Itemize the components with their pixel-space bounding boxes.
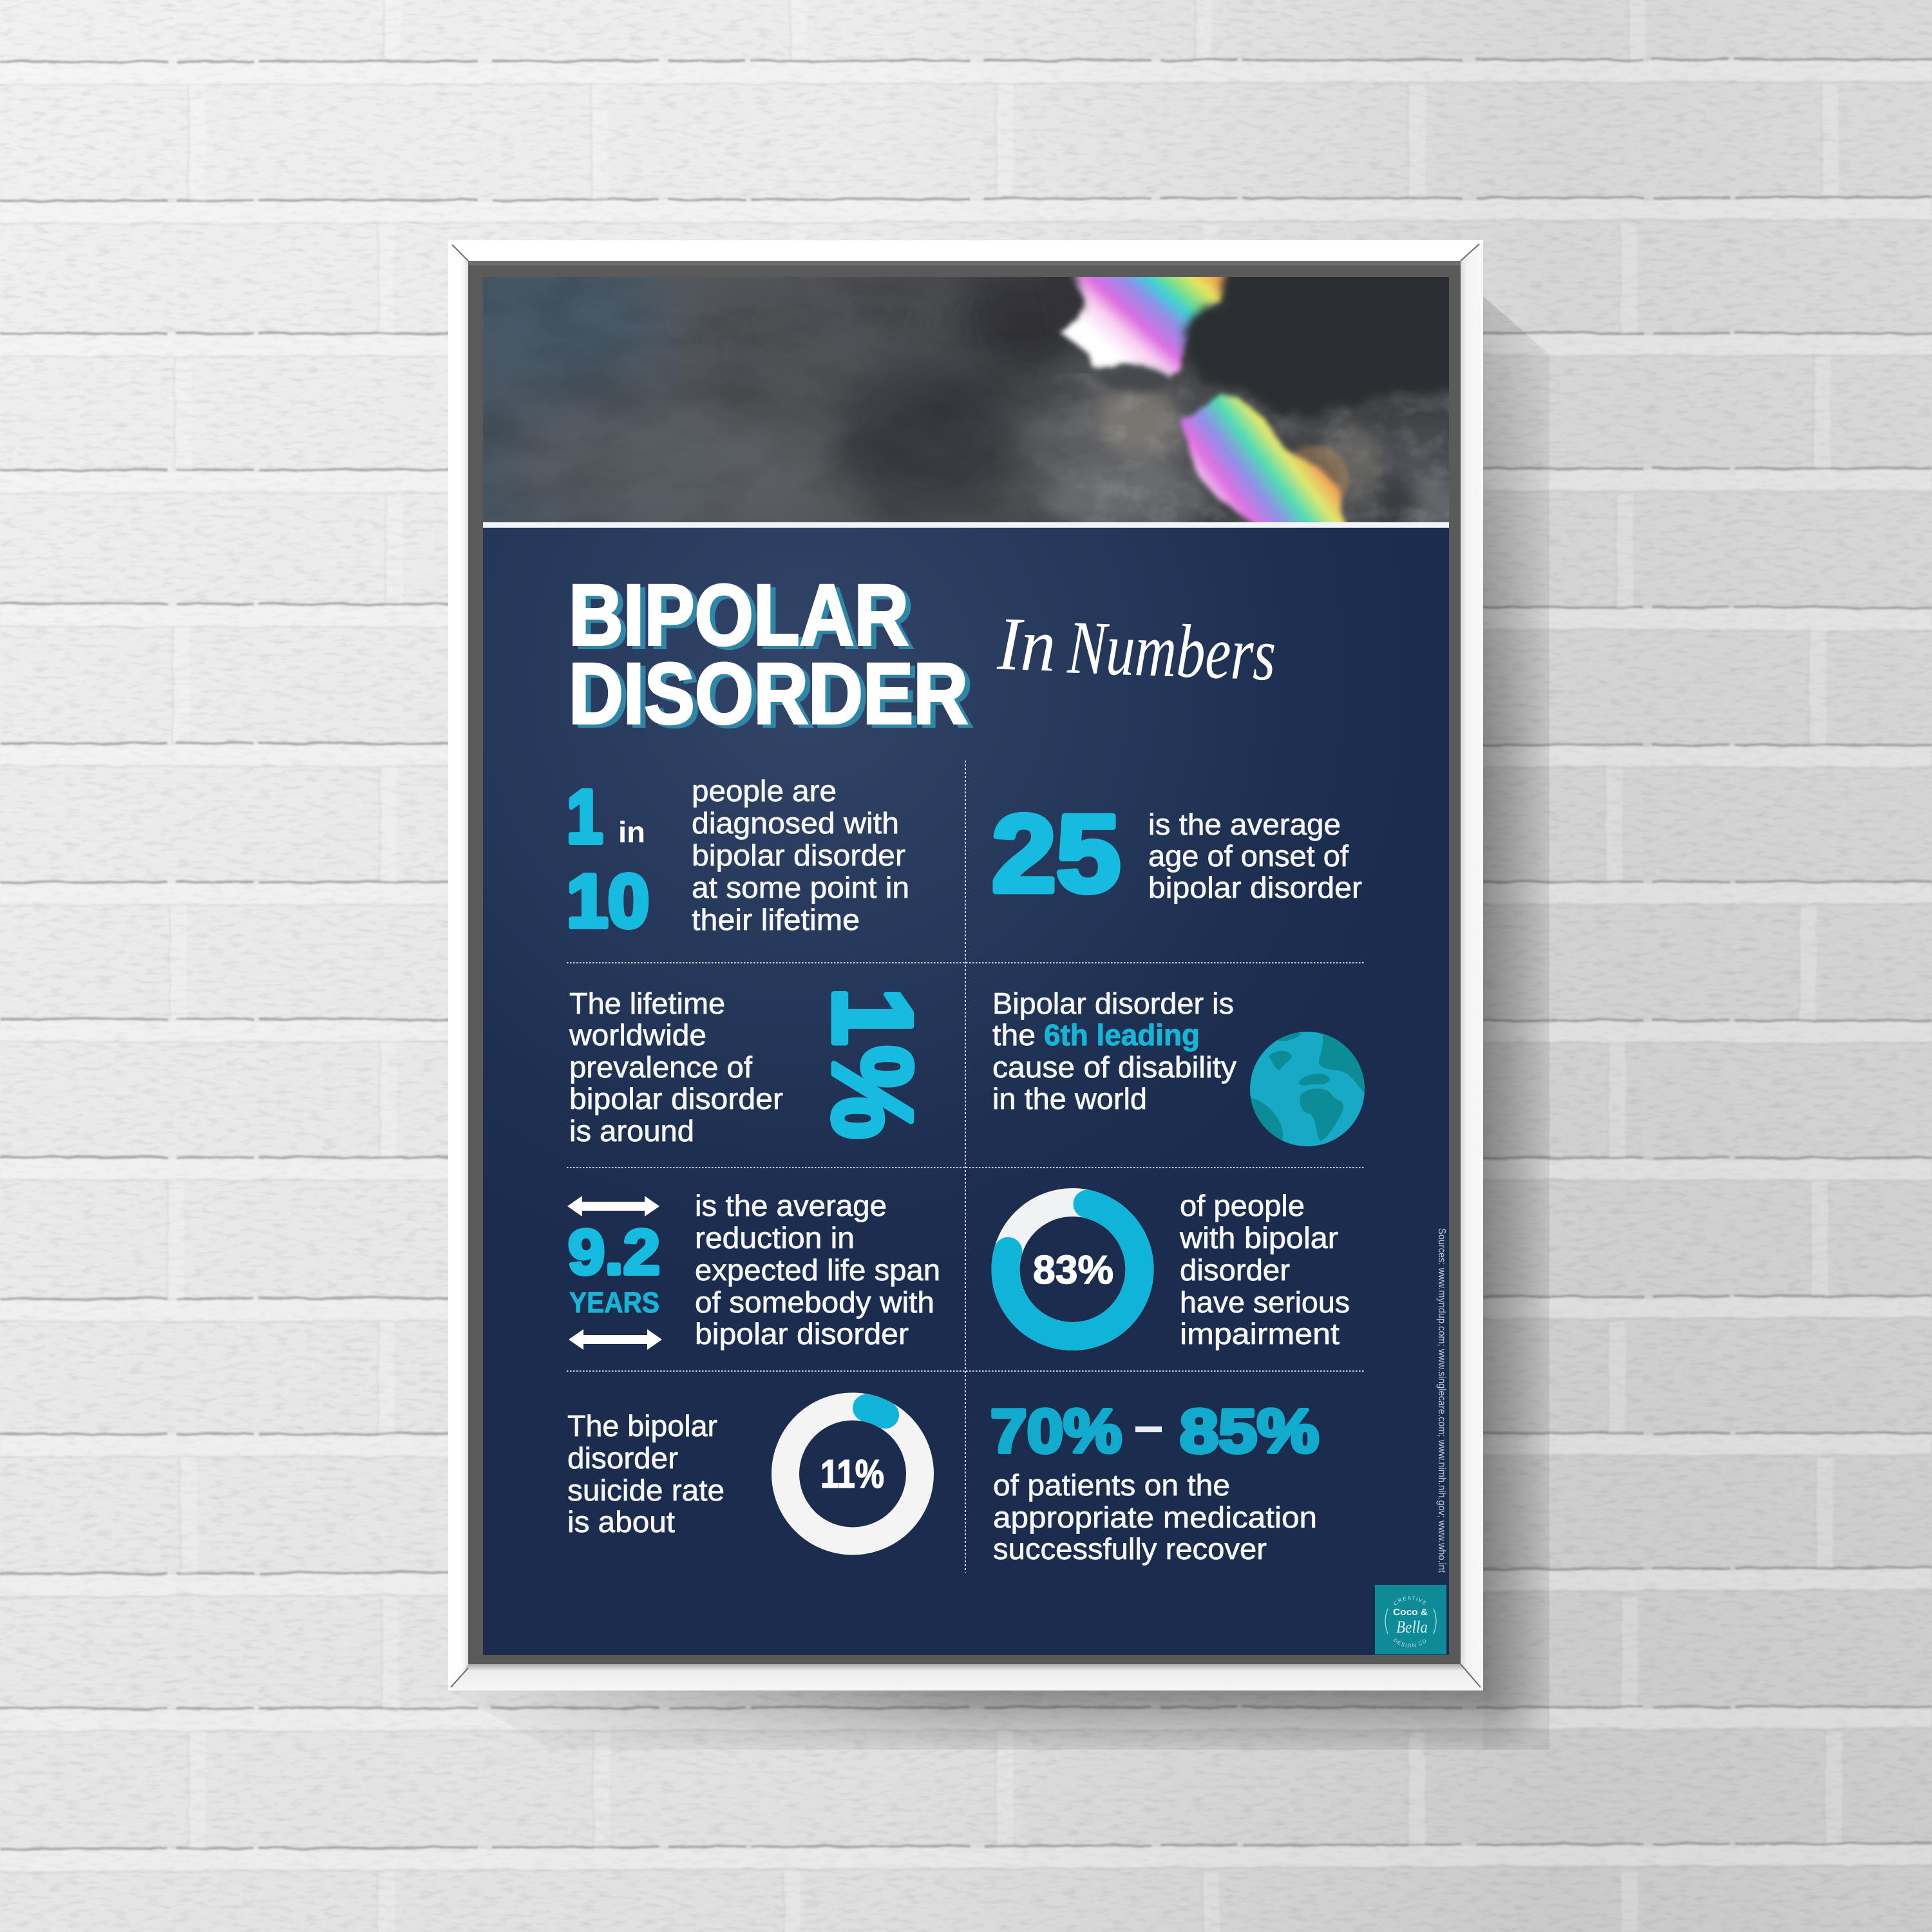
stat: 1 percent prevalence: prevalence of: [569, 1050, 752, 1084]
logo: Coco and Bella Creative Design Co: DESIGN CO: [1394, 1638, 1426, 1647]
stat: 9.2 years: reduction in: [695, 1221, 855, 1255]
stat: 1 percent prevalence: is around: [569, 1114, 694, 1148]
stat: 70 to 85 percent recover: [990, 1397, 1319, 1566]
icon: top double arrow: [567, 1196, 659, 1217]
stat: 1 in 10: bipolar disorder: [692, 838, 905, 872]
stat: 1 in 10: [567, 774, 909, 943]
icon: globe: [1250, 1032, 1365, 1146]
stat: 70 to 85 percent recover: of patients on the: [993, 1468, 1230, 1502]
stat: 9.2 years: YEARS: [569, 1286, 659, 1319]
stat: 25 average age: is the average: [1148, 808, 1341, 841]
stat: serious impairment text: with bipolar: [1179, 1221, 1338, 1255]
stat: 6th leading cause of disability: [992, 987, 1236, 1115]
chart: 83 percent donut: [1005, 1202, 1140, 1336]
stat: 9.2 years: bipolar disorder: [695, 1317, 909, 1350]
vertical divider: [567, 761, 1365, 1573]
chart: 83 percent donut: 83%: [1033, 1248, 1113, 1293]
stat: serious impairment text: disorder: [1180, 1253, 1290, 1287]
stat: 25 average age: 25: [992, 793, 1121, 915]
stat: 1 in 10: 10: [567, 859, 649, 943]
icon: bottom double arrow: [569, 1329, 662, 1350]
stat: 6th leading cause of disability: the: [992, 1018, 1036, 1052]
poster frame: [448, 240, 1483, 1690]
stat: suicide rate text: [567, 1409, 724, 1539]
stat: 1 percent prevalence: bipolar disorder: [569, 1082, 783, 1115]
poster navy panel: [483, 528, 1449, 1655]
title: bipolar disorder: BIPOLAR: [574, 571, 914, 667]
subtitle: in numbers: [996, 601, 1277, 697]
stat: serious impairment text: impairment: [1180, 1317, 1340, 1350]
stat: 1 in 10: 1: [567, 775, 603, 858]
frame cast shadow: [448, 283, 1549, 1750]
stat: 70 to 85 percent recover: 70%: [990, 1397, 1122, 1466]
stat: 9.2 years: expected life span: [695, 1253, 940, 1287]
stat: suicide rate text: The bipolar: [567, 1409, 717, 1443]
stat: suicide rate text: is about: [567, 1505, 675, 1539]
stat: 1 in 10: people are: [692, 774, 837, 808]
stat: 9.2 years: of somebody with: [695, 1285, 934, 1319]
logo: Coco and Bella Creative Design Co: Coco &: [1393, 1607, 1428, 1618]
stat: 25 average age: bipolar disorder: [1148, 871, 1362, 904]
stat: 6th leading cause of disability: Bipolar disorder is: [992, 987, 1234, 1020]
stat: 6th leading cause of disability: cause of disability: [992, 1050, 1236, 1084]
photo: storm clouds with rainbow: [457, 258, 1468, 535]
chart: 11 percent donut: [786, 1406, 920, 1541]
stat: 1 percent prevalence: [569, 987, 936, 1148]
title: bipolar disorder: BIPOLAR: [569, 567, 909, 663]
subtitle: in numbers: Numbers: [1066, 605, 1277, 697]
stat: 6th leading cause of disability: 6th leading: [1044, 1018, 1200, 1052]
stat: 9.2 years: 9.2: [568, 1217, 660, 1287]
stat: 1 percent prevalence: 1%: [810, 987, 936, 1139]
logo: Coco and Bella Creative Design Co: Bella: [1396, 1618, 1428, 1636]
stat: 9.2 years: is the average: [695, 1189, 887, 1222]
stat: 70 to 85 percent recover: 85%: [1180, 1397, 1319, 1466]
stat: 70 to 85 percent recover: successfully recover: [993, 1532, 1267, 1566]
stat: 1 in 10: in: [618, 815, 645, 849]
sources note: Sources: www.myndup.com; www.singlecare.com; www.nimh.nih.gov; www.who.int: [1436, 1228, 1447, 1573]
stat: suicide rate text: suicide rate: [567, 1473, 724, 1507]
stat: serious impairment text: [1179, 1189, 1350, 1350]
stat: serious impairment text: have serious: [1180, 1285, 1350, 1319]
stat: 1 percent prevalence: worldwide: [569, 1018, 706, 1052]
stat: 1 in 10: their lifetime: [692, 903, 860, 936]
logo: Coco and Bella Creative Design Co: CREATIVE: [1394, 1596, 1427, 1605]
stat: 70 to 85 percent recover: appropriate medication: [993, 1501, 1317, 1534]
chart: 11 percent donut: 11%: [820, 1452, 884, 1497]
stat: serious impairment text: of people: [1180, 1189, 1305, 1222]
stat: 1 in 10: diagnosed with: [692, 806, 899, 840]
title: bipolar disorder: DISORDER: [574, 649, 973, 745]
photo divider line: [483, 522, 1449, 528]
logo: Coco and Bella Creative Design Co: [1375, 1585, 1446, 1654]
stat: 1 in 10: at some point in: [692, 871, 909, 904]
stat: 25 average age: [992, 793, 1362, 915]
stat: 1 percent prevalence: The lifetime: [569, 987, 725, 1020]
title: bipolar disorder: [569, 567, 973, 745]
stat: 6th leading cause of disability: in the world: [992, 1082, 1147, 1115]
title: bipolar disorder: DISORDER: [569, 646, 968, 742]
stat: suicide rate text: disorder: [567, 1441, 678, 1475]
stat: 25 average age: age of onset of: [1148, 839, 1349, 873]
stat: 9.2 years: [567, 1189, 940, 1350]
subtitle: in numbers: In: [996, 601, 1057, 688]
